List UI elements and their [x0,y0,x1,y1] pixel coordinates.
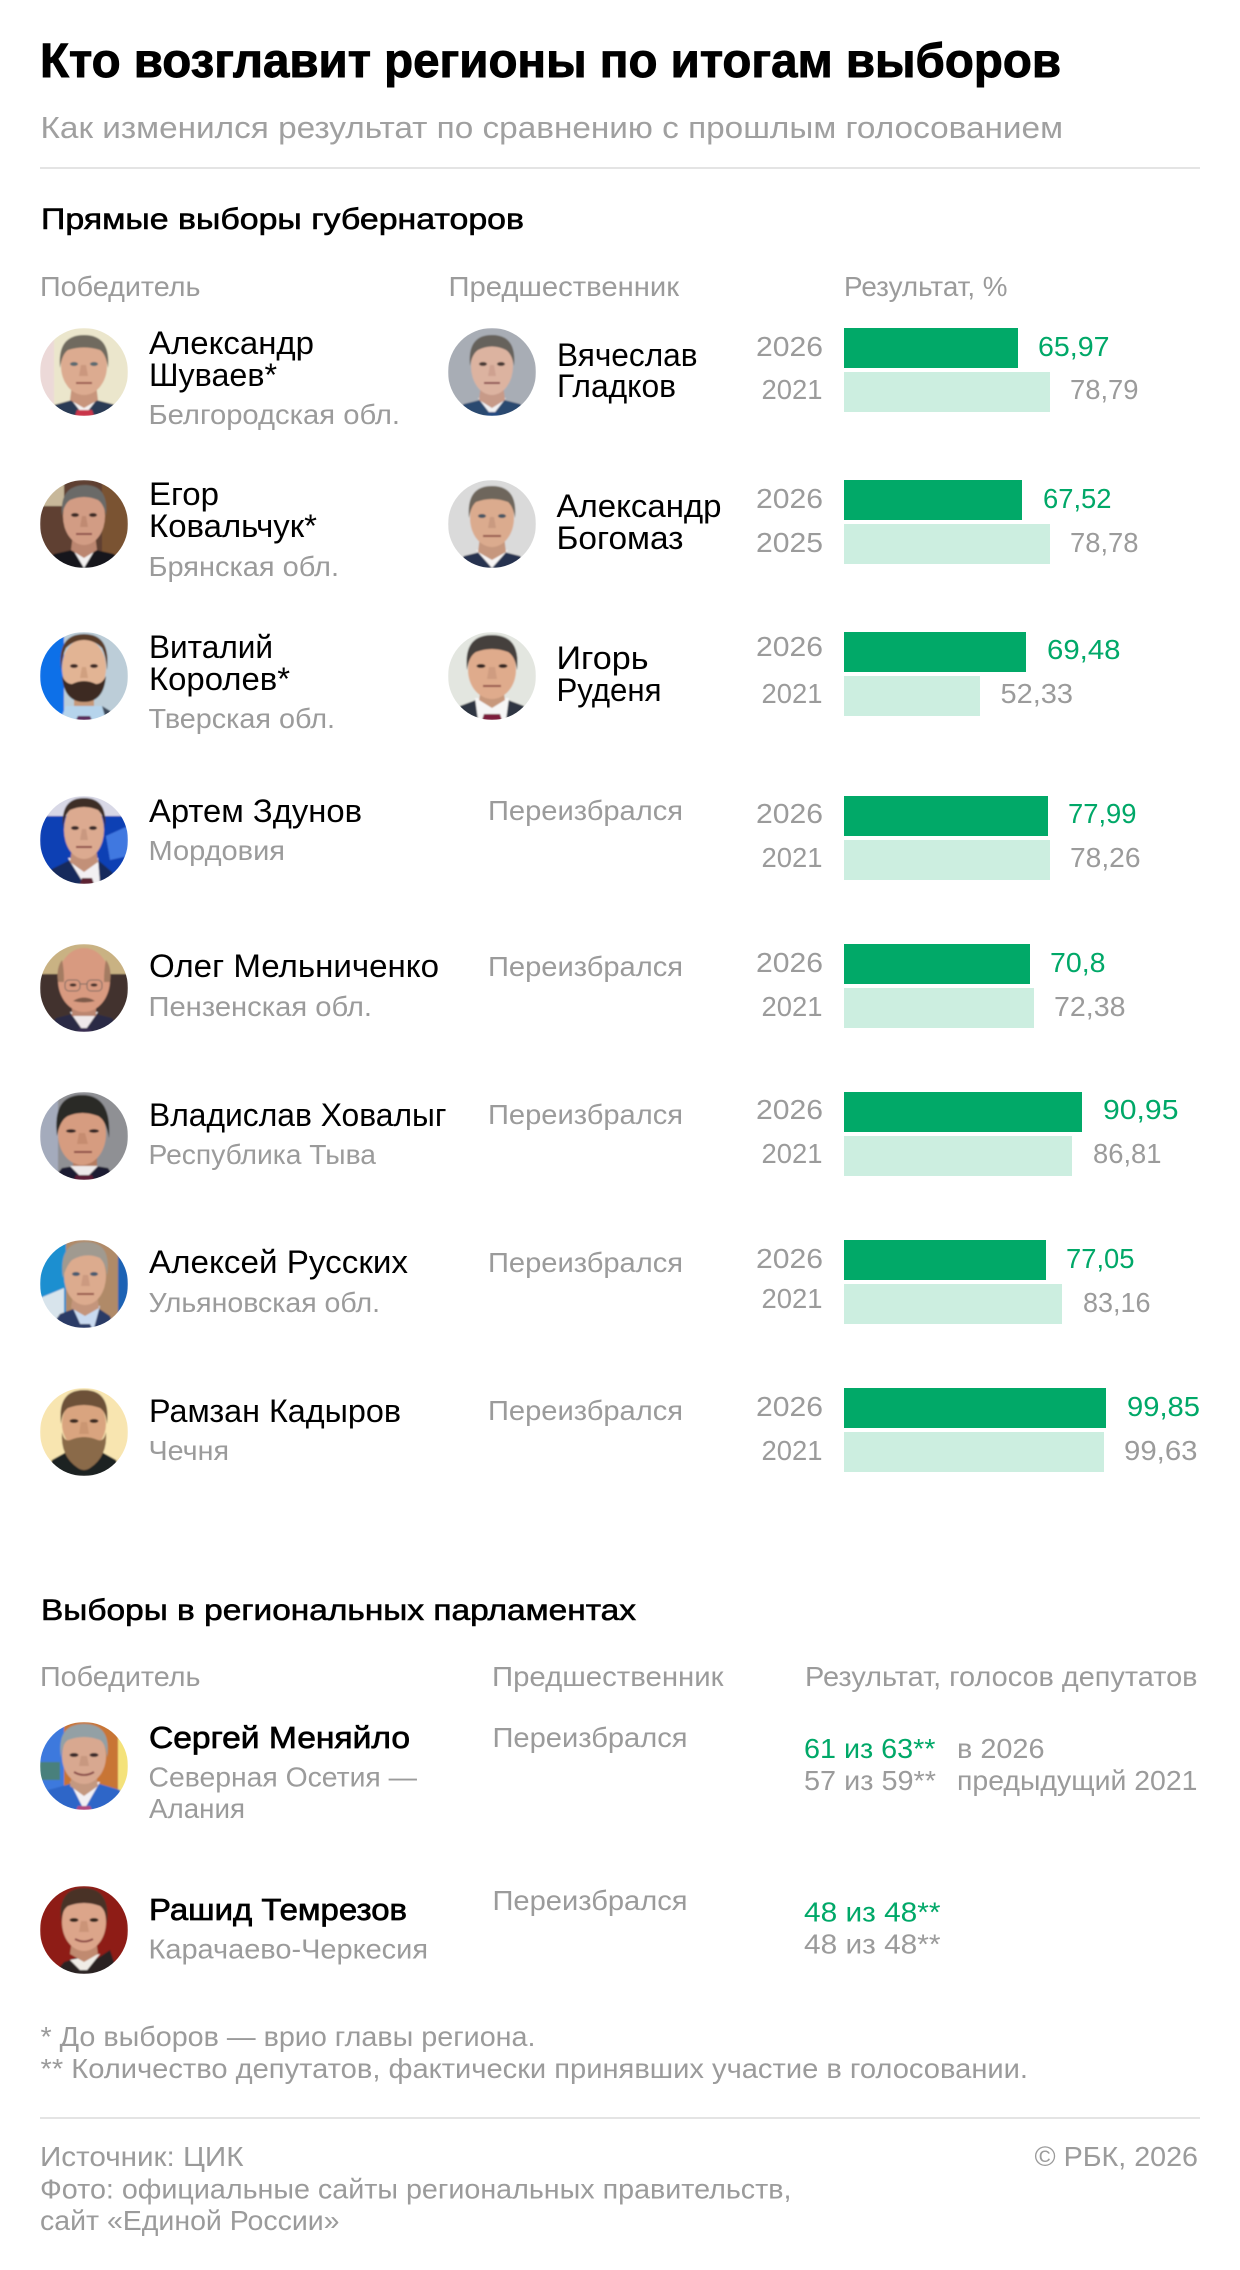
winner name: Егор [149,476,219,512]
bars: 78,26 [1070,842,1140,873]
bars: 99,63 [1124,1435,1198,1466]
predecessor name: Богомаз [556,520,684,556]
bars: 78,78 [1070,527,1138,558]
portrait: Ховалыг [40,1092,128,1180]
row: Chechnya [40,1388,1200,1476]
deputies result: предыдущий 2021 [957,1765,1198,1796]
column headers: governors [40,271,1008,302]
deputies result: 57 из 59** [804,1765,936,1796]
source [40,2141,792,2236]
column headers: governors: Результат, % [844,271,1008,302]
bars: 99,85 [1127,1391,1200,1422]
winner name: Олег Мельниченко [149,948,439,984]
bars: 2026 [756,798,823,829]
portrait: Ковальчук [40,480,128,568]
deputies result [804,1896,941,1960]
bars: 2026 [756,1094,823,1125]
portrait: Меняйло [40,1722,128,1810]
title: Кто возглавит регионы по итогам выборов [40,35,1061,88]
region [148,1762,417,1824]
bars: 77,05 [1066,1243,1134,1274]
region: Тверская обл. [148,703,335,734]
row: Mordovia [40,793,1140,884]
predecessor status: Переизбрался [488,1099,683,1130]
deputies result: 48 из 48** [804,1896,941,1928]
region: Белгородская обл. [148,399,400,430]
deputies result: в 2026 [957,1733,1044,1764]
bars: 77,99 [1068,798,1136,829]
deputies result [804,1733,1198,1796]
winner name: Владислав Ховалыг [149,1097,446,1133]
portrait: Гладков [448,328,536,416]
winner name: Виталий [149,629,273,665]
row: Bryansk [40,476,1138,582]
winner name: Александр [149,325,314,361]
source: Источник: ЦИК [40,2141,244,2172]
predecessor name [556,488,722,556]
source: сайт «Единой России» [40,2205,340,2236]
predecessor status: Переизбрался [488,951,683,982]
bars [756,328,1138,412]
bars: 2026 [756,947,823,978]
bars: 2021 [762,678,822,709]
deputies result: 61 из 63** [804,1733,936,1764]
deputies result: 48 из 48** [804,1928,941,1960]
portrait: Здунов [40,796,128,884]
bars: 52,33 [1000,678,1073,709]
bars: 2021 [762,991,822,1022]
bars: 2026 [756,483,823,514]
row: Tver [40,629,1120,734]
region: Пензенская обл. [148,991,372,1022]
bars: 2021 [762,1138,822,1169]
row: North Ossetia [40,1720,1198,1824]
region: Ульяновская обл. [148,1287,380,1318]
predecessor status: Переизбрался [492,1722,688,1753]
bars: 2025 [756,527,823,558]
bars [756,1240,1150,1324]
bars: 2021 [762,842,822,873]
footnotes: ** Количество депутатов, фактически принявших участие в голосовании. [40,2053,1028,2084]
bars [756,1092,1178,1176]
source: Фото: официальные сайты региональных правительств, [40,2174,792,2204]
row: Belgorod [40,325,1138,430]
region: Северная Осетия — [148,1762,417,1792]
row: Ulyanovsk [40,1240,1150,1328]
bars [756,480,1138,564]
predecessor status: Переизбрался [492,1885,688,1916]
bars: 2021 [762,1435,822,1466]
region: Карачаево-Черкесия [148,1934,428,1964]
region: Алания [149,1793,245,1824]
row: Penza [40,944,1126,1032]
bars [756,631,1120,716]
predecessor name: Вячеслав [557,337,698,373]
heading: direct governor elections: Прямые выборы губернаторов [41,203,524,236]
portrait: Богомаз [448,480,536,568]
predecessor name: Игорь [556,640,648,676]
portrait: Мельниченко [40,944,128,1032]
bars: 70,8 [1050,947,1106,978]
subtitle: Как изменился результат по сравнению с прошлым голосованием [40,110,1063,145]
bars: 65,97 [1038,331,1110,362]
winner name [149,629,290,697]
winner name [149,476,317,544]
row: Tuva [40,1092,1178,1180]
region: Республика Тыва [148,1139,376,1170]
winner name: Рамзан Кадыров [149,1393,401,1429]
predecessor name: Руденя [556,672,662,708]
region: Чечня [148,1435,229,1466]
winner name: Артем Здунов [149,793,362,829]
winner name: Сергей Меняйло [149,1720,410,1755]
predecessor status: Переизбрался [488,1395,683,1426]
winner name: Рашид Темрезов [149,1892,407,1927]
column headers: governors: Предшественник [448,271,680,302]
bars: 2026 [756,1243,823,1274]
column headers: parliaments: Результат, голосов депутатов [805,1661,1198,1692]
portrait: Темрезов [40,1886,128,1974]
portrait: Шуваев [40,328,128,416]
bars: 86,81 [1093,1138,1162,1169]
copyright: © РБК, 2026 [1034,2141,1198,2172]
predecessor name [556,640,662,708]
winner name: Шуваев* [149,357,277,393]
footnotes: * До выборов — врио главы региона. [40,2021,536,2052]
bars: 2026 [756,631,823,662]
predecessor name: Гладков [557,368,676,404]
column headers: parliaments [40,1661,1198,1692]
bars [756,796,1140,880]
predecessor name: Александр [556,488,722,524]
bars: 2026 [756,1391,823,1422]
bars [756,944,1126,1028]
heading: regional parliaments: Выборы в региональных парламентах [41,1594,636,1627]
region: Брянская обл. [148,551,339,582]
portrait: Русских [40,1240,128,1328]
bars: 72,38 [1054,991,1126,1022]
predecessor name [557,337,698,404]
bars: 90,95 [1103,1094,1178,1125]
footnotes [40,2021,1028,2084]
winner name [149,325,314,393]
column headers: parliaments: Победитель [40,1661,200,1692]
bars: 69,48 [1047,634,1120,665]
winner name: Королев* [149,661,290,697]
bars: 78,79 [1070,374,1138,405]
bars: 67,52 [1043,483,1112,514]
region: Мордовия [148,835,285,866]
portrait: Кадыров [40,1388,128,1476]
winner name: Ковальчук* [149,508,317,544]
predecessor status: Переизбрался [488,795,683,826]
bars: 2026 [756,331,823,362]
portrait: Королев [40,632,128,720]
bars: 83,16 [1083,1287,1150,1318]
portrait: Руденя [448,632,536,720]
predecessor status: Переизбрался [488,1247,683,1278]
bars: 2021 [762,374,822,405]
bars: 2021 [762,1283,822,1314]
column headers: governors: Победитель [40,271,200,302]
winner name: Алексей Русских [149,1244,408,1280]
bars [756,1388,1200,1472]
column headers: parliaments: Предшественник [492,1661,724,1692]
row: Karachay-Cherkessia [40,1885,941,1974]
